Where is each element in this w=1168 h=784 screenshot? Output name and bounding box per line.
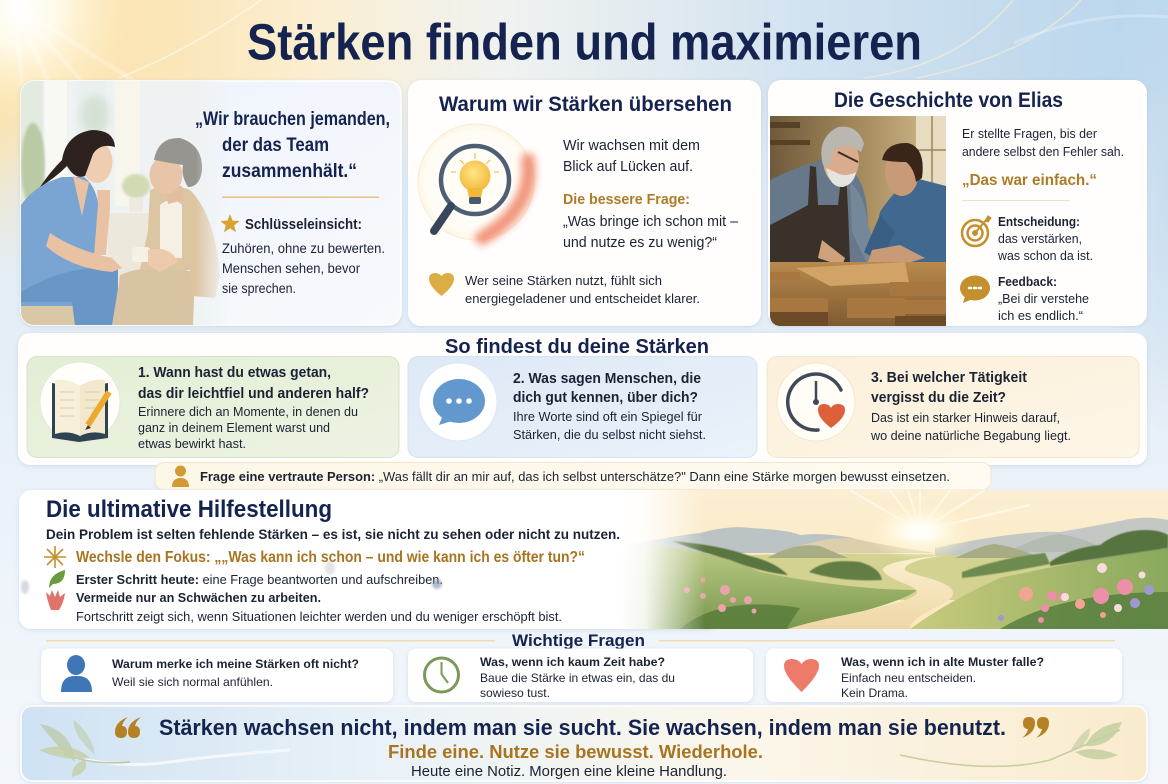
panel: so findest du	[18, 333, 1147, 465]
key insight text	[222, 241, 385, 296]
text	[480, 655, 675, 700]
key insight text: Menschen sehen, bevor	[222, 261, 360, 276]
FAQ card 3	[766, 648, 1122, 702]
flowers	[680, 563, 1168, 629]
text	[841, 655, 1044, 700]
key insight heading: Schlüsseleinsicht:	[245, 217, 362, 233]
text: Stärken, die du selbst nicht siehst.	[513, 428, 706, 442]
icon: book and pencil	[40, 362, 120, 442]
feedback text: ich es endlich.“	[998, 309, 1083, 323]
quote text	[195, 108, 390, 182]
icon: target	[962, 216, 991, 246]
icon: person	[61, 655, 92, 692]
quote text: „Wir brauchen jemanden,	[195, 108, 390, 130]
quote: „Das war einfach.“	[962, 172, 1097, 189]
icon: magnifier with bulb	[418, 124, 534, 240]
card: step 2	[408, 356, 757, 458]
note: Wer seine Stärken nutzt, fühlt sich	[465, 273, 662, 288]
text: dich gut kennen, über dich?	[513, 390, 698, 406]
text: 1. Wann hast du etwas getan,	[138, 365, 331, 381]
feedback text: „Bei dir verstehe	[998, 292, 1089, 306]
text	[870, 370, 1071, 443]
heading: So findest du deine Stärken	[445, 336, 709, 358]
panel: elias	[768, 80, 1147, 326]
card: step 1	[27, 356, 399, 458]
decoration: left branch	[39, 720, 290, 777]
banner: closing quote	[21, 706, 1147, 781]
progress: Fortschritt zeigt sich, wenn Situationen leichter werden und du weniger erschöpft bist.	[76, 609, 562, 624]
text: Einfach neu entscheiden.	[841, 671, 976, 685]
better question: „Was bringe ich schon mit –	[563, 214, 739, 230]
icon: person	[172, 466, 189, 487]
text	[513, 371, 706, 442]
story text	[962, 127, 1124, 159]
icon: clock	[424, 658, 458, 692]
younger man	[878, 179, 946, 262]
text	[112, 657, 359, 689]
heading: Die ultimative Hilfestellung	[46, 496, 332, 523]
panel: quote	[21, 81, 401, 325]
text	[138, 365, 369, 451]
text: Ihre Worte sind oft ein Spiegel für	[513, 410, 702, 424]
final line: Heute eine Notiz. Morgen eine kleine Handlung.	[411, 763, 727, 780]
text: 3. Bei welcher Tätigkeit	[871, 370, 1027, 386]
icon: closing quote	[1022, 717, 1049, 738]
text: ganz in deinem Element warst und	[138, 421, 330, 435]
body text: Wir wachsen mit dem	[563, 138, 700, 154]
illustration: nurse and elderly woman	[21, 81, 231, 325]
key insight text: Zuhören, ohne zu bewerten.	[222, 241, 385, 256]
text: Was, wenn ich in alte Muster falle?	[841, 655, 1044, 669]
panel: ultimative Hilfestellung	[19, 490, 1168, 629]
landscape	[620, 490, 1168, 629]
heading: Die Geschichte von Elias	[834, 89, 1063, 112]
body text: Blick auf Lücken auf.	[563, 159, 693, 175]
note: energiegeladener und entscheidet klarer.	[465, 291, 700, 306]
illustration: workshop	[770, 116, 946, 326]
note	[465, 273, 700, 306]
heading: wichtige Fragen: Wichtige Fragen	[512, 631, 645, 650]
icon: clock with heart	[777, 363, 855, 441]
icon: heart	[784, 659, 819, 692]
title: Stärken finden und maximieren	[247, 14, 922, 70]
text: sowieso tust.	[480, 686, 550, 700]
icon: opening quote	[115, 717, 141, 738]
FAQ card 2	[408, 648, 753, 702]
focus line: Wechsle den Fokus: „„Was kann ich schon – und wie kann ich es öfter tun?“	[76, 549, 585, 566]
decoration: right branch	[900, 722, 1122, 766]
quote text: der das Team	[222, 134, 329, 156]
better question	[563, 191, 739, 251]
decision text	[997, 215, 1093, 263]
background	[0, 0, 1168, 430]
story text: Er stellte Fragen, bis der	[962, 127, 1097, 141]
icon: star	[220, 214, 240, 232]
problem statement: Dein Problem ist selten fehlende Stärken – es ist, sie nicht zu sehen oder nicht zu nutzen.	[46, 526, 620, 542]
decision text: was schon da ist.	[997, 249, 1093, 263]
heading: Warum wir Stärken übersehen	[439, 93, 732, 116]
story text: andere selbst den Fehler sah.	[962, 145, 1124, 159]
callout text: Frage eine vertraute Person: „Was fällt dir an mir auf, das ich selbst unterschätze?" Dann eine Stärke morgen bewusst einsetzen.	[200, 469, 950, 484]
icon: coral	[46, 590, 65, 610]
text: vergisst du die Zeit?	[871, 390, 1006, 406]
elderly woman	[113, 268, 195, 325]
better question: Die bessere Frage:	[563, 191, 690, 208]
icon: sun sparkle	[44, 546, 66, 568]
text: 2. Was sagen Menschen, die	[513, 371, 701, 387]
text: das dir leichtfiel und anderen half?	[138, 386, 369, 402]
FAQ card 1	[41, 648, 393, 702]
avoid: Vermeide nur an Schwächen zu arbeiten.	[76, 590, 321, 605]
older man	[770, 160, 868, 262]
callout: trusted person	[155, 462, 991, 490]
icon: speech bubble	[419, 363, 497, 441]
subline: Finde eine. Nutze sie bewusst. Wiederhole.	[388, 742, 763, 762]
icon: chat bubble	[960, 276, 990, 303]
text: wo deine natürliche Begabung liegt.	[870, 429, 1071, 443]
first step: Erster Schritt heute: eine Frage beantworten und aufschreiben.	[76, 572, 443, 587]
text: Baue die Stärke in etwas ein, das du	[480, 671, 675, 685]
text: Erinnere dich an Momente, in denen du	[138, 405, 358, 419]
better question: und nutze es zu wenig?“	[563, 235, 717, 251]
feedback text	[998, 275, 1089, 323]
key insight text: sie sprechen.	[222, 281, 296, 296]
text: etwas bewirkt hast.	[138, 437, 246, 451]
body text	[563, 138, 700, 175]
text: Das ist ein starker Hinweis darauf,	[871, 411, 1060, 425]
decision text: das verstärken,	[998, 232, 1082, 246]
text: Was, wenn ich kaum Zeit habe?	[480, 655, 665, 669]
quote text: zusammenhält.“	[222, 160, 357, 182]
text: Warum merke ich meine Stärken oft nicht?	[112, 657, 359, 671]
decision text: Entscheidung:	[998, 215, 1080, 229]
panel: warum	[408, 80, 761, 326]
card: step 3	[767, 356, 1139, 458]
text: Weil sie sich normal anfühlen.	[112, 675, 273, 689]
text: Kein Drama.	[841, 686, 908, 700]
nurse	[21, 177, 118, 325]
icon: leaf	[49, 570, 65, 588]
table and planks	[770, 262, 946, 326]
feedback text: Feedback:	[998, 275, 1057, 289]
quote sentence: Stärken wachsen nicht, indem man sie sucht. Sie wachsen, indem man sie benutzt.	[159, 715, 1006, 740]
icon: heart	[429, 273, 454, 296]
